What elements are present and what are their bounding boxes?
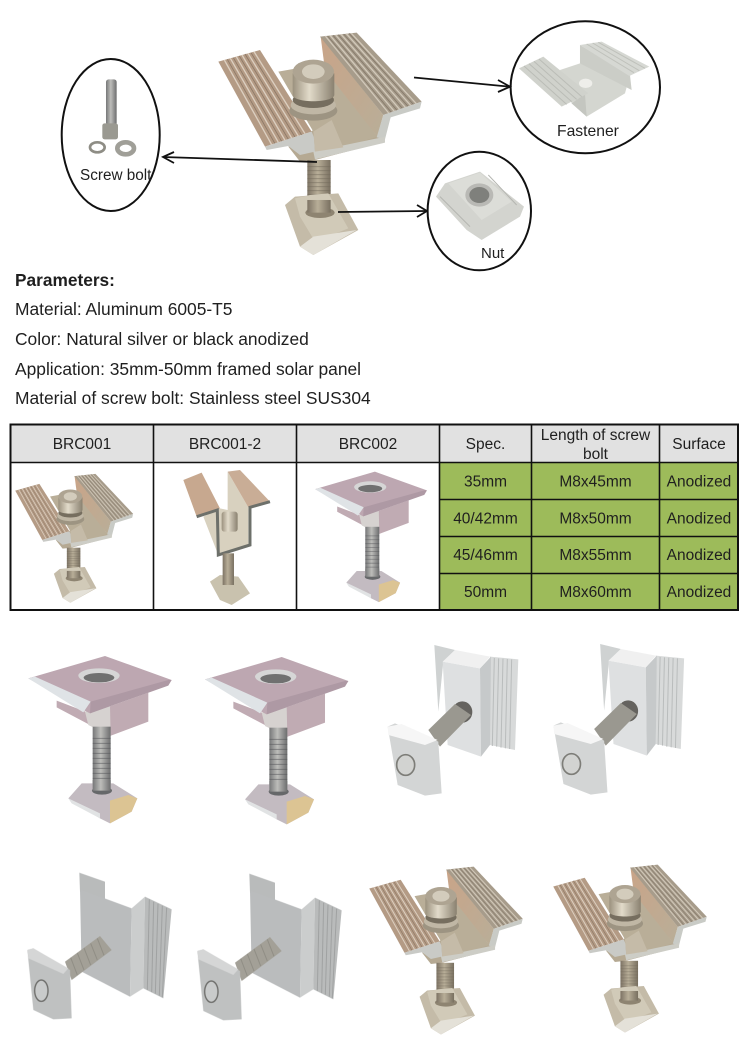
gallery photo: grey clamp 2: [197, 874, 342, 1020]
table header labels: BRC001-2: [189, 436, 261, 453]
gallery photo: ridged clamp 1: [369, 867, 523, 1035]
gallery photo: side view clamp 2: [553, 644, 684, 795]
gallery photo: side view clamp 1: [388, 645, 518, 796]
callout: nut: Nut: [481, 245, 505, 262]
table data: 35mm: M8x45mm: [559, 474, 632, 490]
table data: 45/46mm: Anodized: [667, 547, 731, 564]
parameter: color: Color: Natural silver or black anodized: [15, 329, 309, 349]
table header labels: Surface: [672, 436, 726, 453]
table header labels: Spec.: [466, 436, 505, 453]
parameter: application: Application: 35mm-50mm framed solar panel: [15, 359, 361, 379]
table data: 40/42mm: M8x50mm: [559, 510, 632, 528]
gallery photo: pink clamp 1: [28, 656, 172, 823]
table data: 40/42mm: Anodized: [667, 510, 731, 528]
table data: 45/46mm: 45/46mm: [453, 547, 518, 564]
table data: 50mm: Anodized: [667, 584, 731, 601]
table data: 50mm: 50mm: [464, 584, 507, 601]
table data: 50mm: M8x60mm: [559, 584, 632, 601]
table photo: BRC001-2: [183, 470, 270, 605]
specification table: [10, 424, 738, 610]
arrow: to screw bolt: [163, 152, 317, 163]
table header labels: bolt: [583, 446, 609, 463]
table photo: BRC001: [15, 474, 133, 603]
heading: parameters: Parameters:: [15, 270, 115, 290]
callout: fastener: [511, 21, 660, 153]
table photo: BRC002: [315, 472, 427, 602]
parameters text block: [15, 270, 371, 408]
table data: 40/42mm: [453, 510, 731, 528]
callout: fastener: Fastener: [557, 123, 619, 140]
table header labels: [53, 427, 726, 463]
table header row background: [10, 424, 738, 462]
table header labels: BRC001: [53, 436, 111, 453]
table data: 40/42mm: 40/42mm: [453, 510, 518, 528]
arrow: to fastener: [414, 78, 510, 92]
callout: screw bolt: Screw bolt: [80, 167, 152, 184]
callout: screw bolt: [62, 59, 160, 211]
green specification cells: [439, 462, 738, 610]
gallery photo: ridged clamp 2: [553, 865, 707, 1033]
gallery photo: grey clamp 1: [27, 873, 172, 1019]
main product photo: clamp assembly: [218, 33, 422, 255]
table data: 50mm: [464, 584, 731, 601]
table data: 35mm: [464, 474, 731, 490]
table header labels: BRC002: [339, 436, 397, 453]
gallery photo: pink clamp 2: [205, 657, 348, 824]
table data: 45/46mm: M8x55mm: [559, 547, 632, 564]
table header labels: Length of screw: [541, 427, 651, 444]
table data: 35mm: Anodized: [667, 474, 731, 490]
parameter: screw bolt material: Material of screw bolt: Stainless steel SUS304: [15, 388, 371, 408]
arrow: to nut: [338, 205, 427, 217]
callout: nut: [428, 152, 531, 270]
parameter: material: Material: Aluminum 6005-T5: [15, 299, 232, 319]
table data: 45/46mm: [453, 547, 731, 564]
table grid lines: [10, 424, 738, 610]
table data: 35mm: 35mm: [464, 474, 507, 490]
